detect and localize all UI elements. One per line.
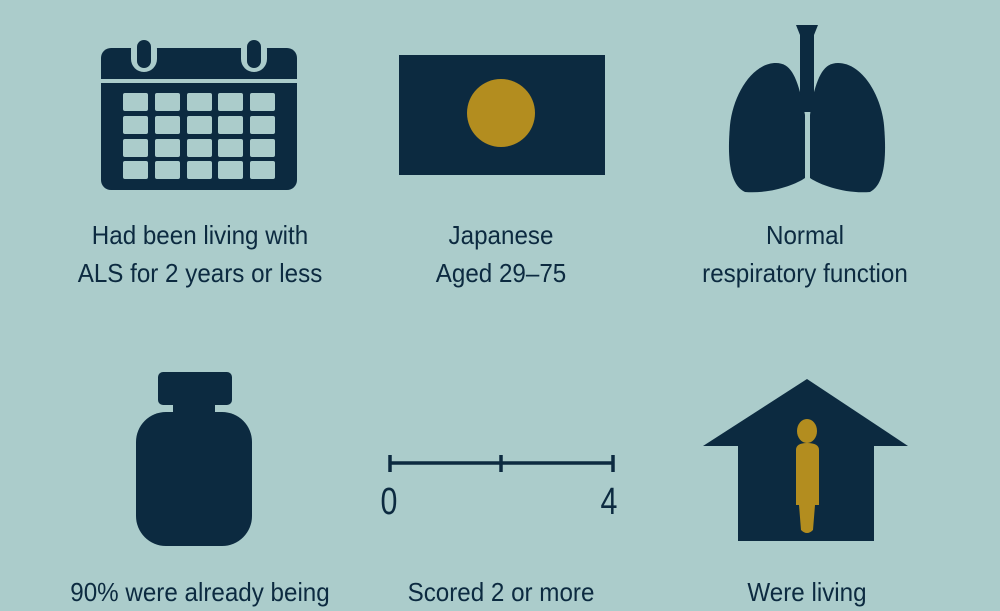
text: respiratory: [702, 220, 908, 288]
text: living: Were living: [747, 577, 867, 607]
text: living with ALS: Had been living with: [92, 220, 308, 250]
text: living with ALS: ALS for 2 years or less: [78, 258, 322, 288]
icon: medicine bottle: [136, 372, 252, 546]
icon: score scale 0 to 4: 0: [381, 481, 397, 523]
text: respiratory: Normal: [766, 220, 844, 250]
icon: lungs: [729, 25, 885, 192]
text: scored: Scored 2 or more: [408, 577, 594, 607]
text: Japanese aged: Japanese: [449, 220, 553, 250]
icon: score scale 0 to 4: 4: [601, 481, 617, 523]
text: Japanese aged: Aged 29–75: [436, 258, 566, 288]
text: living with ALS: [78, 220, 322, 288]
icon: house with person: [703, 379, 908, 541]
icon: score scale 0 to 4: [381, 455, 617, 523]
icon: Japanese flag: [399, 55, 605, 175]
text: Japanese aged: [436, 220, 566, 288]
icon: calendar: [101, 36, 297, 190]
text: 90% treated: 90% were already being: [70, 577, 330, 607]
text: respiratory: respiratory function: [702, 258, 908, 288]
